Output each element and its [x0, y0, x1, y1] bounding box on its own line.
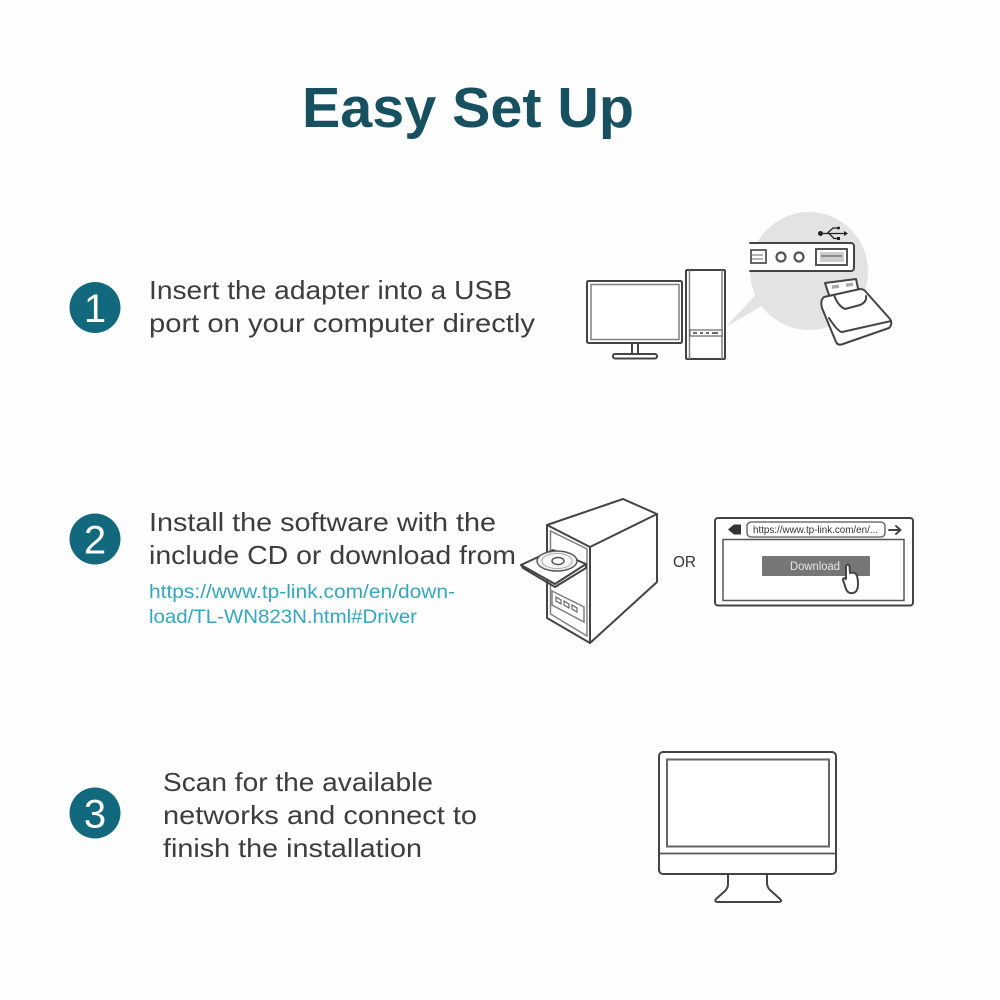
illustration: browser download window — [715, 518, 913, 606]
illustration: monitor — [659, 752, 836, 902]
step 1 number badge: 1 — [84, 287, 106, 331]
title: Easy Set Up — [302, 76, 634, 140]
step 2 number badge — [70, 514, 120, 564]
download button — [762, 556, 870, 576]
illustration: tower with CD tray — [521, 499, 657, 643]
CD tray — [521, 550, 586, 584]
monitor — [587, 281, 682, 358]
step 1 text: Insert the adapter into a USB — [149, 275, 512, 305]
step 3 number badge: 3 — [84, 792, 106, 836]
download button: Download — [790, 561, 840, 573]
OR label: OR — [673, 554, 696, 571]
step 3 text: networks and connect to — [163, 800, 477, 830]
forward arrow — [889, 526, 900, 534]
download link: load/TL-WN823N.html#Driver — [149, 607, 418, 628]
download link — [149, 582, 455, 628]
step 1 — [70, 212, 891, 359]
URL bar — [747, 522, 885, 537]
icon: USB symbol — [818, 226, 848, 240]
step 3 text: finish the installation — [163, 833, 422, 863]
step 3 text — [163, 767, 477, 863]
URL bar: https://www.tp-link.com/en/... — [753, 525, 878, 536]
step 2 text: Install the software with the — [149, 507, 496, 537]
download link: https://www.tp-link.com/en/down- — [149, 582, 455, 603]
illustration: computer with USB port and adapter — [587, 212, 891, 359]
USB adapter — [821, 279, 891, 345]
step 3 number badge — [70, 788, 120, 838]
icon: pointing hand — [843, 564, 858, 593]
zoom circle with wedge — [725, 212, 868, 330]
step 1 text — [149, 275, 535, 338]
step 3 — [70, 752, 836, 902]
computer tower — [686, 270, 725, 359]
step 2 — [70, 499, 913, 643]
step 2 text: include CD or download from — [149, 540, 516, 570]
step 3 text: Scan for the available — [163, 767, 433, 797]
step 2 number badge: 2 — [84, 518, 106, 562]
back arrow — [728, 524, 741, 534]
step 2 text — [149, 507, 516, 570]
drive bay — [552, 591, 584, 622]
step 1 text: port on your computer directly — [149, 308, 535, 338]
USB port panel — [750, 243, 854, 271]
step 1 number badge — [70, 282, 120, 333]
